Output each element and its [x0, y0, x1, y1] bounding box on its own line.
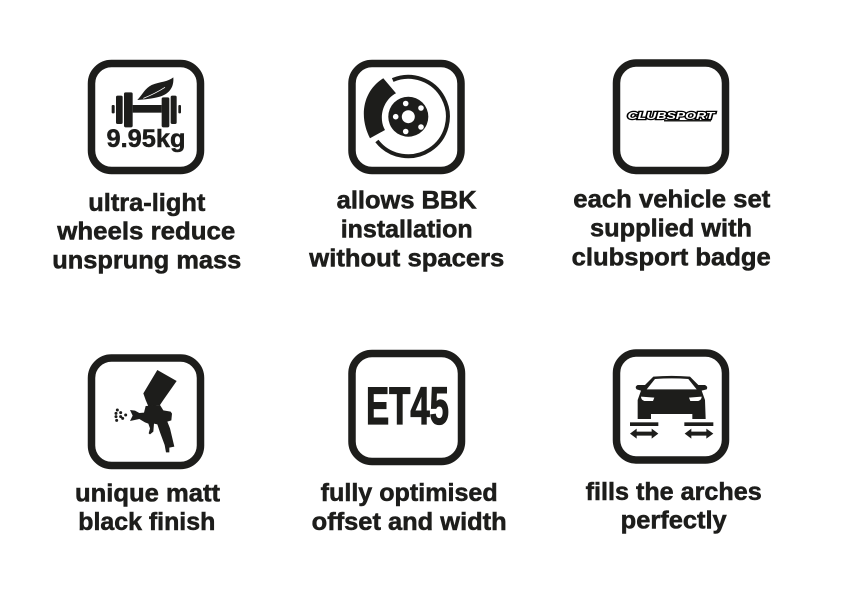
icon: dumbbell with feather and weight — [92, 64, 200, 170]
panel: matt black finish — [75, 358, 221, 536]
icon: brake disc and caliper — [352, 64, 461, 170]
panel: ultra-light wheels — [52, 64, 241, 274]
panel: clubsport badge — [572, 63, 771, 272]
icon: spray gun — [92, 358, 200, 466]
caption: offset and width: offset and width — [312, 508, 507, 536]
panel: fills the arches — [586, 353, 762, 534]
panel: ET45 offset — [312, 354, 507, 536]
caption: clubsport badge: clubsport badge — [572, 244, 771, 272]
caption: BBK installation: allows BBK — [337, 186, 477, 214]
icon: ET45 — [352, 354, 462, 462]
icon: dumbbell with feather and weight: 9.95kg — [106, 125, 186, 153]
caption: BBK installation: without spacers — [308, 244, 504, 272]
caption: offset and width — [312, 479, 507, 536]
icon: ET45: ET45 — [366, 377, 449, 436]
caption: matt black finish — [75, 480, 221, 536]
caption: ultra-light wheels — [52, 189, 241, 274]
caption: BBK installation: installation — [341, 216, 473, 244]
caption: clubsport badge: supplied with — [590, 214, 752, 242]
icon: car with width arrows — [616, 353, 726, 460]
caption: matt black finish: black finish — [78, 508, 215, 536]
caption: fills the arches — [586, 478, 762, 534]
caption: matt black finish: unique matt — [75, 480, 221, 508]
caption: ultra-light wheels: ultra-light — [88, 189, 206, 217]
caption: clubsport badge — [572, 186, 771, 272]
icon: clubsport badge: CLUBSPORT — [628, 111, 716, 122]
caption: BBK installation — [308, 186, 504, 272]
caption: fills the arches: fills the arches — [586, 478, 762, 506]
icon: clubsport badge — [616, 63, 726, 170]
caption: clubsport badge: each vehicle set — [573, 186, 771, 214]
panel: BBK installation — [308, 64, 504, 272]
caption: ultra-light wheels: unsprung mass — [52, 246, 241, 274]
caption: fills the arches: perfectly — [621, 506, 727, 534]
caption: offset and width: fully optimised — [321, 479, 498, 507]
caption: ultra-light wheels: wheels reduce — [56, 218, 235, 246]
